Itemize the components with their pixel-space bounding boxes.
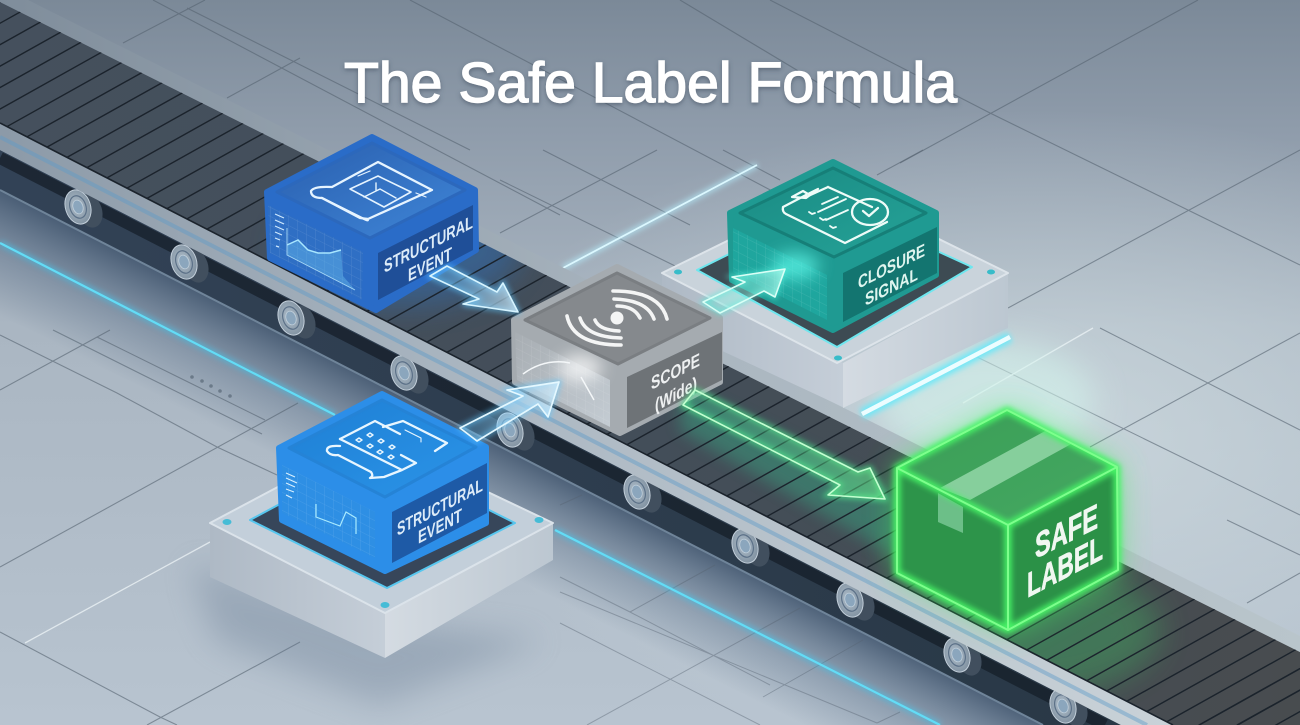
rollers <box>61 186 1092 725</box>
right face label: STRUCTURAL <box>397 475 483 541</box>
floor shadow under form pedestal <box>190 565 545 705</box>
right face label: EVENT <box>408 244 452 287</box>
pedestal: structural event base <box>210 437 553 658</box>
arrow: structural event to scope <box>430 266 518 312</box>
right face label <box>392 463 487 563</box>
left face panel <box>733 228 827 320</box>
lower rail <box>0 123 1173 725</box>
tape <box>938 430 1073 533</box>
icon: clipboard with check <box>783 187 888 243</box>
top face <box>897 410 1117 525</box>
box: structural event (form) <box>279 394 487 571</box>
right face label <box>843 227 937 322</box>
icon: signal arcs <box>567 291 667 345</box>
right face label: CLOSURE <box>858 240 925 294</box>
safe label text <box>1027 495 1103 606</box>
top face <box>740 168 926 257</box>
left face <box>897 468 1008 630</box>
arrow: structural event to scope, lower <box>460 382 559 441</box>
conveyor underside <box>0 150 1121 725</box>
left face diagram <box>515 332 610 427</box>
top face <box>525 273 710 364</box>
title: The Safe Label Formula <box>344 51 957 115</box>
icon: keypad form <box>327 421 447 478</box>
box: structural event (blueprint) <box>267 137 476 310</box>
right face label <box>627 332 722 428</box>
right face label: SCOPE <box>651 349 700 395</box>
left face chart <box>268 205 363 300</box>
icon: blueprint <box>311 162 432 220</box>
pedestal: closure signal base <box>662 188 1010 414</box>
box: scope (wide) <box>514 267 722 433</box>
right face <box>1008 467 1118 630</box>
safe label text: LABEL <box>1027 527 1103 606</box>
right face label <box>378 205 473 300</box>
right face label: SIGNAL <box>865 264 918 311</box>
top face <box>289 400 476 497</box>
floor glow around output area <box>875 340 1095 460</box>
left face chart <box>282 465 375 558</box>
arrow: scope to safe label <box>683 390 885 499</box>
right face label: (Wide) <box>655 373 697 417</box>
right face label: EVENT <box>418 505 462 549</box>
glow line: upper floor strip <box>563 165 757 268</box>
glowing edges <box>897 410 1118 630</box>
box: closure signal <box>730 162 937 330</box>
top face <box>277 143 465 238</box>
right face label: STRUCTURAL <box>384 212 473 278</box>
glow line: floor light strip <box>0 243 940 725</box>
safe label text: SAFE <box>1035 495 1098 567</box>
arrow: scope to closure signal <box>703 269 785 313</box>
box: safe label <box>897 410 1118 630</box>
